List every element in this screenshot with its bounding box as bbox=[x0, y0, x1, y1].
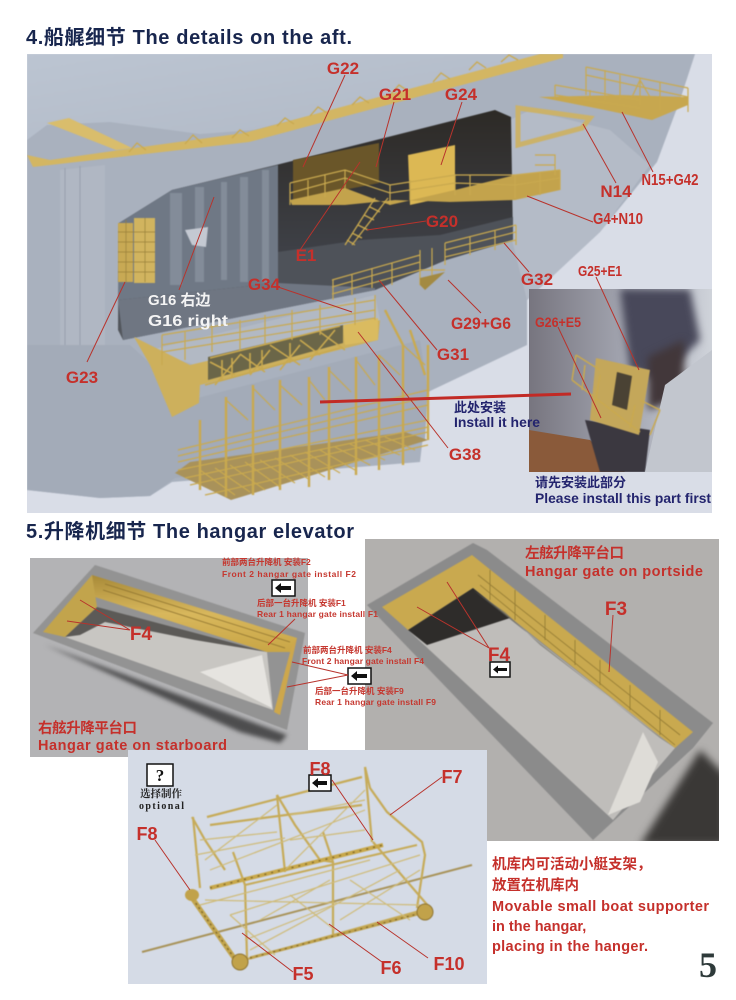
F8 icon bbox=[309, 775, 331, 791]
part labels bbox=[66, 59, 699, 464]
note: install first: 请先安装此部分 bbox=[535, 475, 626, 490]
inset background bbox=[529, 289, 712, 472]
part labels bbox=[136, 759, 465, 984]
optional icon: ? bbox=[156, 766, 164, 785]
part labels: G26+E5 bbox=[535, 314, 581, 330]
caption: portside: Hangar gate on portside bbox=[525, 564, 703, 580]
red instructions between photos: Rear 1 hangar gate install F1 bbox=[257, 609, 378, 619]
red instructions between photos: 后部一台升降机 安装F1 bbox=[257, 598, 346, 608]
note: install here bbox=[454, 400, 540, 427]
part labels: F8 bbox=[309, 759, 331, 779]
part labels: G24 bbox=[445, 85, 478, 104]
panel: boat supporter photo bbox=[128, 750, 487, 984]
note: install here: Install it here bbox=[454, 414, 540, 430]
callout lines bbox=[87, 75, 653, 448]
part labels: G20 bbox=[426, 212, 458, 231]
note: boat supporter: 放置在机库内 bbox=[492, 876, 579, 894]
tray bbox=[367, 543, 725, 845]
page number: 5 bbox=[699, 945, 717, 985]
panel: starboard hangar gate photo bbox=[30, 558, 308, 757]
title: section 4: 4.船艉细节 The details on the aft. bbox=[26, 26, 352, 49]
brass frame bbox=[142, 767, 472, 970]
F4 label, lines and icon: F4 bbox=[488, 645, 511, 666]
part labels: G22 bbox=[327, 59, 359, 78]
caption: portside bbox=[525, 544, 703, 580]
note: boat supporter: Movable small boat supporter bbox=[492, 899, 709, 915]
red instructions between photos: 后部一台升降机 安装F9 bbox=[315, 686, 404, 696]
panel: aft photo bbox=[27, 54, 712, 513]
part labels: G34 bbox=[248, 275, 281, 294]
caption: starboard: 右舷升降平台口 bbox=[38, 719, 137, 737]
tray bbox=[33, 565, 305, 743]
part labels: G38 bbox=[449, 445, 481, 464]
optional icon: optional bbox=[139, 801, 184, 812]
cage framework G38 bbox=[175, 310, 428, 500]
note: G16 right bbox=[148, 291, 229, 330]
note: install first: Please install this part first bbox=[535, 490, 711, 506]
gold deck catwalk bbox=[27, 54, 563, 167]
red instructions between photos bbox=[222, 557, 436, 707]
caption: portside: 左舷升降平台口 bbox=[525, 544, 624, 562]
part labels: G23 bbox=[66, 368, 98, 387]
ladder bbox=[345, 198, 388, 245]
note: G16 right: G16 右边 bbox=[148, 291, 211, 309]
optional icon bbox=[139, 764, 184, 812]
hull bbox=[27, 54, 695, 498]
hangar opening bbox=[118, 110, 513, 340]
part labels: F7 bbox=[441, 767, 463, 787]
gate hatch G24 and upper gallery bbox=[290, 143, 560, 205]
caption: starboard bbox=[38, 719, 227, 754]
caption: starboard: Hangar gate on starboard bbox=[38, 738, 227, 754]
arrow icon: F4 F9 bbox=[348, 668, 371, 684]
panel: portside hangar gate photo bbox=[365, 539, 725, 845]
part labels: N15+G42 bbox=[642, 172, 699, 189]
inset callout lines bbox=[558, 277, 639, 418]
F4 label and lines bbox=[66, 600, 152, 640]
photo background bbox=[128, 750, 487, 984]
part labels: G29+G6 bbox=[451, 314, 511, 333]
title: section 5: 5.升降机细节 The hangar elevator bbox=[26, 520, 354, 543]
F4 label and lines: F4 bbox=[130, 624, 153, 645]
note: boat supporter: in the hangar, bbox=[492, 919, 586, 935]
part labels: G25+E1 bbox=[578, 263, 622, 280]
install line bbox=[320, 394, 571, 402]
part labels: F10 bbox=[433, 954, 465, 974]
optional icon: 选择制作 bbox=[140, 787, 182, 800]
arrow icon: F2 bbox=[272, 580, 295, 596]
part labels: F6 bbox=[380, 958, 402, 978]
red instructions between photos: Front 2 hangar gate install F2 bbox=[222, 569, 356, 579]
part labels: G31 bbox=[437, 345, 469, 364]
note: boat supporter bbox=[492, 855, 709, 955]
large platform with truss bbox=[134, 295, 380, 417]
F3 label and line bbox=[606, 602, 626, 672]
bay doors bbox=[118, 218, 155, 283]
note: G16 right: G16 right bbox=[148, 313, 229, 330]
part labels: G32 bbox=[521, 270, 553, 289]
part labels: E1 bbox=[296, 246, 316, 265]
part labels: G21 bbox=[379, 85, 411, 104]
red instructions between photos: Rear 1 hangar gate install F9 bbox=[315, 697, 436, 707]
inset photo bbox=[529, 289, 712, 472]
upper right gallery and bracket bbox=[518, 67, 688, 145]
rails G32 G29 bbox=[332, 225, 516, 300]
F4 label, lines and icon bbox=[417, 582, 511, 677]
note: boat supporter: 机库内可活动小艇支架， bbox=[492, 855, 652, 873]
part labels: G4+N10 bbox=[593, 211, 643, 228]
inset brass part bbox=[572, 355, 660, 435]
part labels: N14 bbox=[600, 182, 632, 201]
red instructions between photos: Front 2 hangar gate install F4 bbox=[302, 656, 424, 666]
F3 label and line: F3 bbox=[605, 599, 627, 620]
part labels: F5 bbox=[292, 964, 314, 984]
red instructions between photos: 前部两台升降机 安装F2 bbox=[222, 557, 311, 567]
photo background bbox=[365, 539, 719, 841]
note: install here: 此处安装 bbox=[454, 400, 506, 415]
note: install first bbox=[535, 475, 711, 506]
note: boat supporter: placing in the hanger. bbox=[492, 939, 648, 955]
part labels: F8 bbox=[136, 824, 158, 844]
photo background bbox=[30, 558, 308, 757]
callout lines bbox=[155, 777, 442, 972]
photo background bbox=[27, 54, 712, 513]
red instructions between photos: 前部两台升降机 安装F4 bbox=[303, 645, 392, 655]
